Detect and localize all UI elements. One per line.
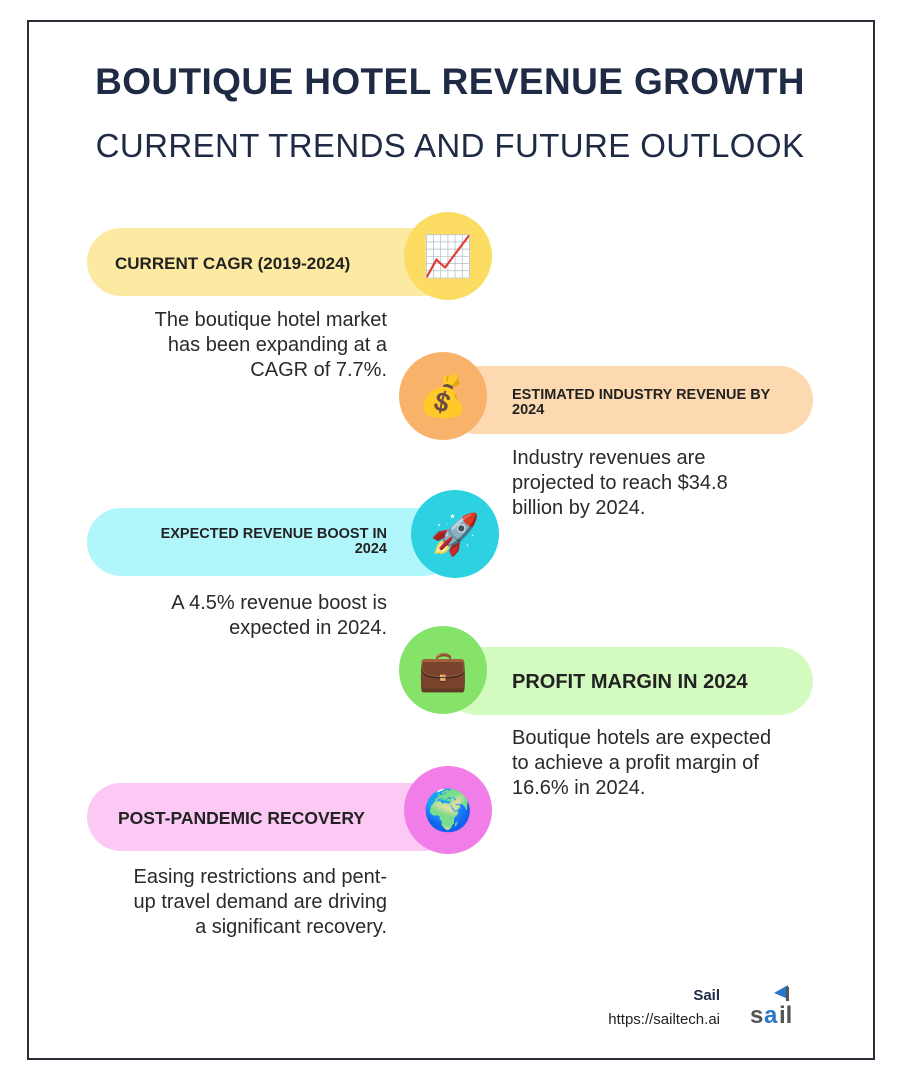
icon: briefcase — [399, 626, 487, 714]
text: CAGR: The boutique hotel market — [155, 309, 387, 331]
pill: current CAGR — [87, 228, 457, 296]
text: revenue — [512, 447, 728, 519]
icon: chart — [404, 212, 492, 300]
footer brand — [608, 985, 792, 1028]
text: revenue: billion by 2024. — [512, 497, 645, 519]
text: boost: A 4.5% revenue boost is — [171, 592, 387, 614]
text: recovery: Easing restrictions and pent- — [134, 866, 387, 888]
logo — [750, 985, 792, 1027]
text: recovery: up travel demand are driving — [134, 891, 387, 913]
text: boost — [171, 592, 387, 639]
text: margin — [512, 727, 771, 799]
subtitle: CURRENT TRENDS AND FUTURE OUTLOOK — [96, 127, 804, 164]
label: revenue boost — [161, 526, 387, 557]
label: estimated revenue: ESTIMATED INDUSTRY REVENUE BY — [512, 387, 770, 403]
icon: briefcase: 💼 — [418, 646, 468, 694]
icon: chart: 📈 — [423, 232, 473, 280]
label: recovery: POST-PANDEMIC RECOVERY — [118, 808, 365, 828]
label: estimated revenue: 2024 — [512, 402, 544, 418]
text: margin: to achieve a profit margin of — [512, 752, 759, 774]
label: current CAGR: CURRENT CAGR (2019-2024) — [115, 254, 350, 273]
pill: revenue boost — [87, 508, 457, 576]
icon: rocket — [411, 490, 499, 578]
pill: profit margin — [443, 647, 813, 715]
text: recovery: a significant recovery. — [195, 916, 387, 938]
icon: globe: 🌍 — [423, 786, 473, 834]
label: estimated revenue — [512, 387, 770, 418]
text: boost: expected in 2024. — [229, 617, 387, 639]
title: BOUTIQUE HOTEL REVENUE GROWTH — [95, 61, 805, 102]
item 4: profit margin — [399, 626, 813, 799]
text: margin: Boutique hotels are expected — [512, 727, 771, 749]
text: revenue: projected to reach $34.8 — [512, 472, 728, 494]
text: CAGR: CAGR of 7.7%. — [250, 359, 387, 381]
pill: recovery — [87, 783, 457, 851]
text: revenue: Industry revenues are — [512, 447, 705, 469]
url: https://sailtech.ai — [608, 1011, 720, 1028]
text: CAGR — [155, 309, 387, 381]
icon: money bag: 💰 — [418, 372, 468, 420]
item 5: recovery — [87, 766, 492, 938]
item 2: estimated revenue — [399, 352, 813, 519]
text: margin: 16.6% in 2024. — [512, 777, 645, 799]
brand name: Sail — [693, 987, 720, 1004]
label: revenue boost: 2024 — [355, 541, 387, 557]
item 3: revenue boost — [87, 490, 499, 639]
icon: money bag — [399, 352, 487, 440]
item 1: current CAGR — [87, 212, 492, 381]
label: profit margin: PROFIT MARGIN IN 2024 — [512, 671, 748, 693]
icon: rocket: 🚀 — [430, 510, 480, 558]
text: CAGR: has been expanding at a — [168, 334, 387, 356]
pill: estimated revenue — [443, 366, 813, 434]
icon: globe — [404, 766, 492, 854]
text: recovery — [134, 866, 387, 938]
label: revenue boost: EXPECTED REVENUE BOOST IN — [161, 526, 387, 542]
